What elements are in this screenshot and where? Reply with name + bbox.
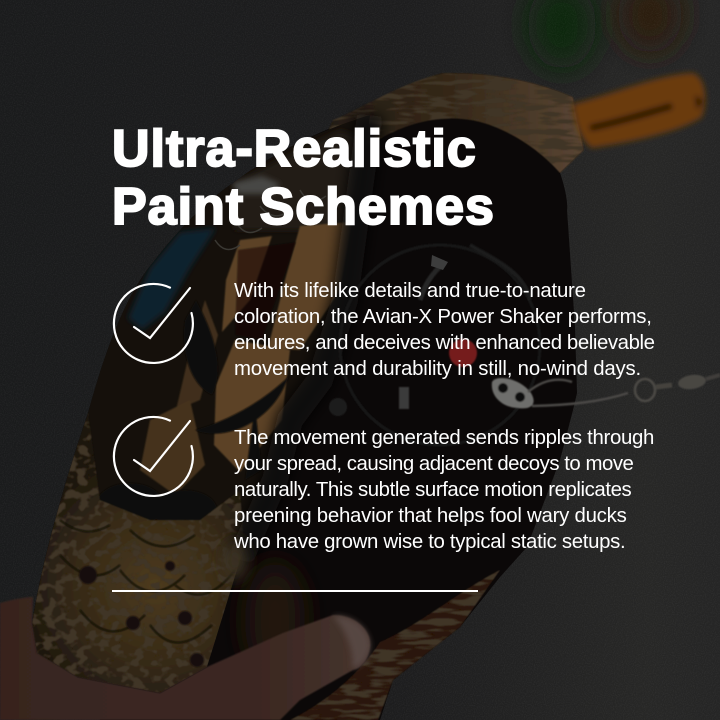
grey feather outlines [215, 190, 326, 249]
icon: check circle 2 [112, 416, 194, 497]
paragraph 1 [234, 280, 655, 380]
grey white neck ring patch [232, 176, 280, 194]
paragraph 1: movement and durability in still, no-wind days. [234, 358, 641, 380]
black feather shapes [96, 242, 296, 530]
painted back feathers [32, 115, 370, 693]
orange bill [573, 73, 705, 148]
lower right wood-brown feathers [290, 570, 500, 720]
tan painted stripes [140, 222, 352, 495]
soft shadow over paint boundary [240, 115, 370, 560]
title: Paint Schemes [112, 178, 495, 236]
thumbnail [333, 616, 370, 668]
paragraph 2: your spread, causing adjacent decoys to move [234, 453, 633, 475]
lower breast scale pattern [32, 413, 245, 693]
paragraph 1: coloration, the Avian-X Power Shaker performs, [234, 306, 652, 328]
lower right dark brown body glow [245, 562, 305, 678]
paragraph 1: endures, and deceives with enhanced believable [234, 332, 655, 354]
paragraph 2: preening behavior that helps fool wary ducks [234, 505, 627, 527]
paragraph 2 [234, 427, 654, 553]
icon: check circle 1 [112, 282, 194, 364]
paragraph 1: With its lifelike details and true-to-nature [234, 280, 586, 302]
title: Ultra-Realistic [112, 120, 477, 178]
paragraph 2: The movement generated sends ripples through [234, 427, 654, 449]
motor unit [329, 245, 540, 445]
blurred green duck in background [528, 0, 596, 69]
title [112, 120, 495, 236]
divider rule [112, 590, 478, 592]
blue wing speculum [128, 228, 216, 330]
decoy body silhouette [32, 73, 584, 720]
paragraph 2: who have grown wise to typical static setups. [234, 531, 625, 553]
feather ground on top of back [235, 131, 352, 230]
hand and thumb [0, 597, 370, 720]
swivel chain and clip [492, 373, 720, 408]
breast scale arcs and spots [60, 520, 235, 642]
upper neck and head feather band [320, 73, 584, 173]
red indicator light [449, 339, 477, 367]
paragraph 2: naturally. This subtle surface motion replicates [234, 479, 631, 501]
